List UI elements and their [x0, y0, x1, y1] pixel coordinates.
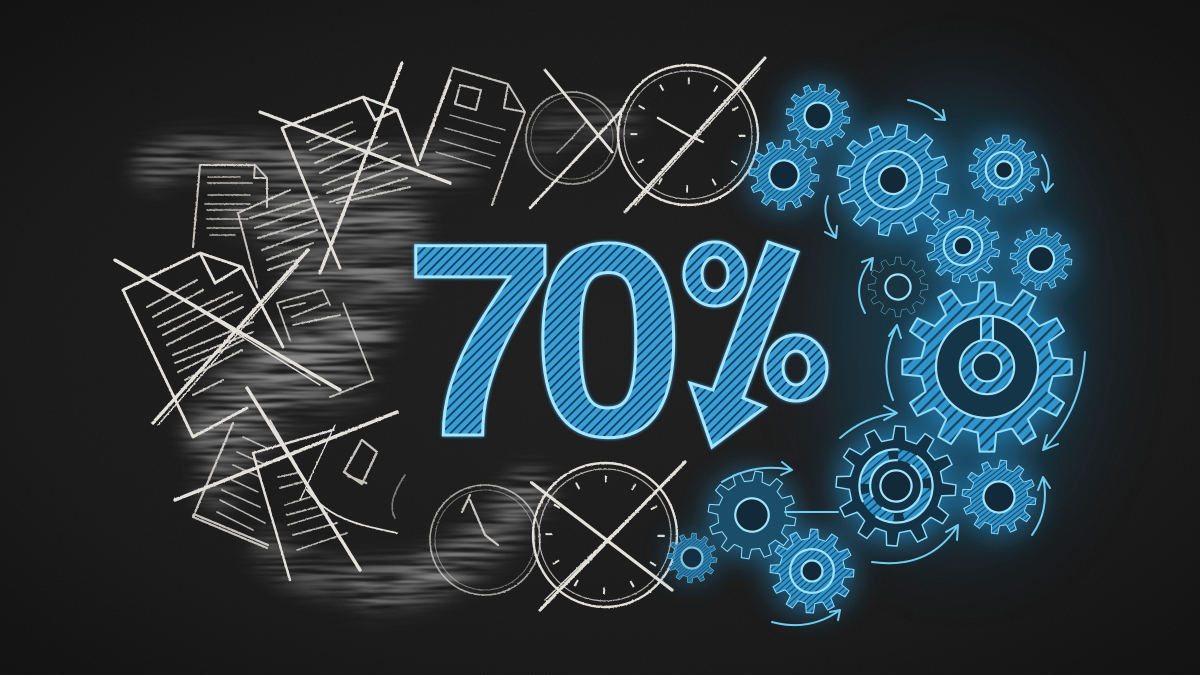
panel: glowing gears: [665, 80, 1090, 625]
headline number 70%: [412, 238, 831, 451]
icon: gear upper left: [746, 137, 822, 213]
headline number 70%: 7: [404, 187, 557, 494]
icon: small tumbling document: [344, 440, 405, 518]
icon: fading gear: [665, 531, 719, 585]
icon: small left document: [193, 165, 267, 247]
icon: gear upper large: [828, 115, 958, 245]
icon: faint bottom clock: [430, 485, 540, 595]
icon: rotation arrows: [722, 100, 1085, 625]
icon: large top document: [260, 63, 450, 273]
icon: gear bottom: [768, 527, 856, 615]
icon: large bottom clock: [532, 462, 685, 610]
icon: gear center: [919, 202, 1007, 290]
icon: lower large gear with segments: [832, 422, 960, 550]
headline number 70%: 0: [532, 187, 685, 494]
icon: top right document: [420, 68, 525, 205]
icon: middle document: [238, 190, 317, 287]
icon: gear bottom left: [702, 465, 802, 565]
icon: main large gear: [902, 282, 1072, 452]
icon: right middle document: [277, 290, 373, 397]
percent lower ring: [765, 335, 827, 401]
icon: gear top small: [782, 80, 854, 152]
icon: outlined gear: [868, 257, 928, 317]
percent sign: %: [678, 198, 832, 446]
panel: crossed-out paperwork and clocks: [115, 58, 765, 610]
icon: bottom document: [175, 388, 397, 580]
icon: faint top clock: [526, 70, 622, 208]
gear glow: [672, 84, 1090, 612]
percent upper ring: [684, 242, 746, 306]
icon: bottom left document: [193, 423, 268, 548]
erased chalk smudges: [155, 120, 625, 590]
icon: gear right small: [1007, 225, 1075, 293]
icon: gear lower right: [958, 456, 1040, 538]
icon: large left document: [115, 250, 340, 437]
icon: gear upper right: [967, 133, 1041, 207]
icon: downward arrow slash: [690, 242, 798, 447]
icon: large top clock: [618, 58, 765, 212]
